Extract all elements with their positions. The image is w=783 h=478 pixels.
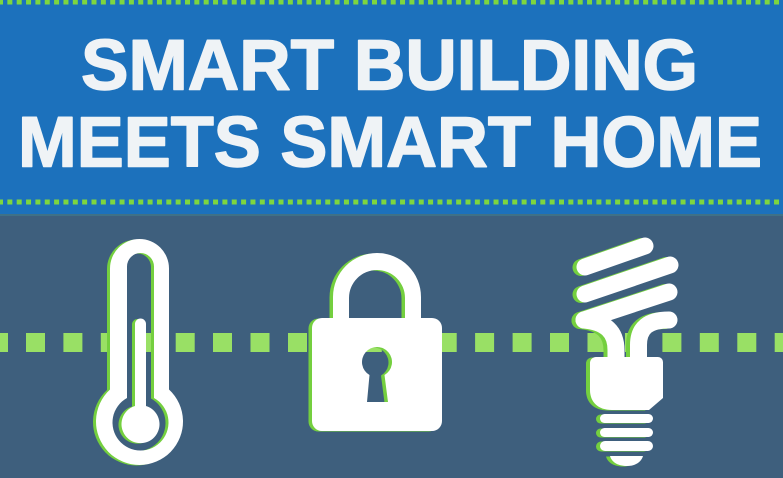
icon: thermometer bbox=[93, 239, 183, 465]
title line 2: MEETS SMART HOME bbox=[18, 103, 762, 182]
panel: lower slate background bbox=[0, 214, 783, 478]
dashed green line bbox=[0, 333, 783, 352]
panel: title banner bbox=[0, 0, 783, 216]
title bbox=[18, 26, 762, 182]
icon: light bulb bbox=[580, 246, 670, 466]
icon: padlock bbox=[308, 253, 442, 432]
title line 1: SMART BUILDING bbox=[81, 26, 698, 105]
